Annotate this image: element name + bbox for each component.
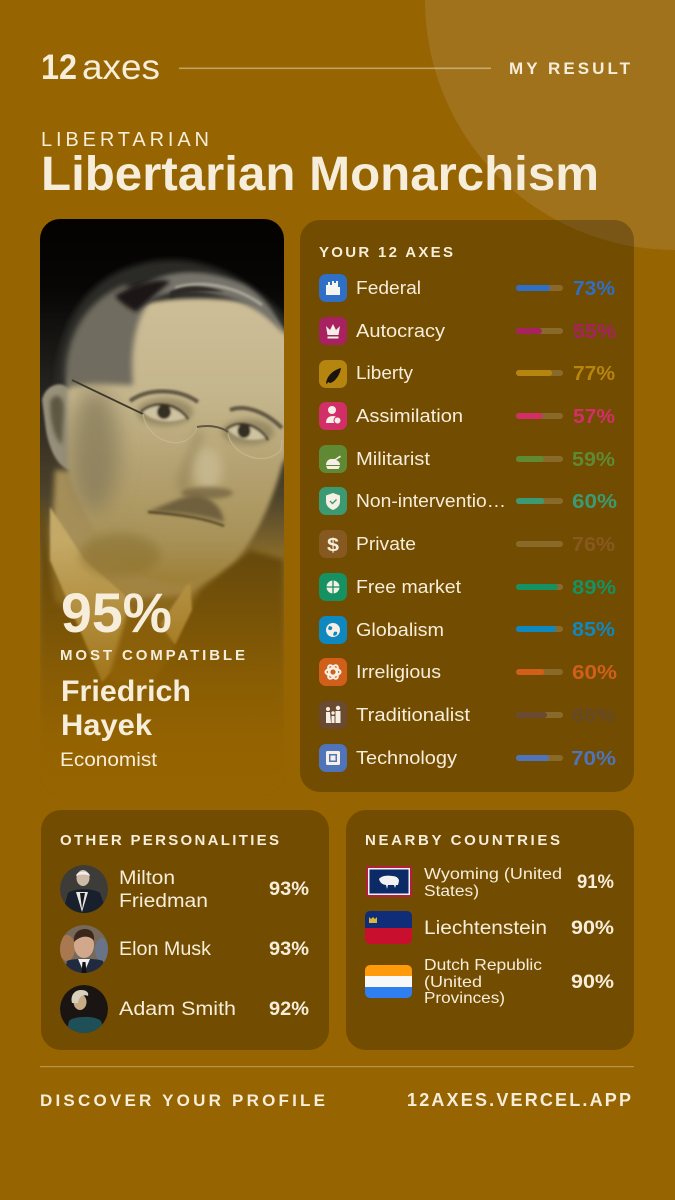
axis row: Free market xyxy=(319,573,616,601)
moustache xyxy=(147,495,224,522)
axis row: Traditionalist: 66% xyxy=(572,705,615,727)
compatibility label: MOST COMPATIBLE xyxy=(60,647,245,664)
personality: Milton Friedman: 93% xyxy=(269,879,309,900)
category: LIBERTARIAN xyxy=(41,129,209,151)
decorative corner circle xyxy=(425,0,675,250)
country: Wyoming: Wyoming (United xyxy=(424,866,562,883)
chin shadow xyxy=(80,533,160,577)
panel: top match portrait xyxy=(40,219,295,795)
axis row: Non-interventionist xyxy=(319,487,617,515)
person role: Economist xyxy=(60,750,158,771)
axis row: Traditionalist: Traditionalist xyxy=(356,705,470,725)
glasses xyxy=(72,380,282,459)
tie xyxy=(110,610,172,673)
person name: Hayek xyxy=(61,709,152,742)
axis row: Free market: 89% xyxy=(572,577,616,599)
axis row: Militarist xyxy=(319,445,615,473)
axis row: Militarist: 59% xyxy=(572,449,615,471)
jacket xyxy=(40,495,284,795)
axis row: Irreligious xyxy=(319,658,617,686)
country: Dutch Republic: Dutch Republic xyxy=(424,957,542,974)
axis row: Technology: Technology xyxy=(356,748,457,768)
personality: Milton Friedman: Friedman xyxy=(119,891,208,912)
axis row: Non-interventionist: 60% xyxy=(572,491,617,513)
axis row: Private: Private xyxy=(356,534,416,554)
header xyxy=(41,48,631,87)
axis row: Free market: Free market xyxy=(356,577,461,597)
logo xyxy=(41,48,160,87)
personality: Elon Musk: Elon Musk xyxy=(119,939,212,960)
axis row: Militarist: Militarist xyxy=(356,449,430,469)
face xyxy=(68,298,295,585)
eye left xyxy=(141,405,188,421)
website: 12AXES.VERCEL.APP xyxy=(407,1090,631,1110)
country: Wyoming xyxy=(366,866,614,900)
country: Liechtenstein: Liechtenstein xyxy=(424,918,547,939)
personality: Elon Musk xyxy=(59,925,309,975)
portrait illustration xyxy=(40,219,295,795)
axis row: Private: 76% xyxy=(572,534,615,556)
temple hair xyxy=(66,285,150,388)
axis row: Federal xyxy=(319,274,615,302)
logo: 12 xyxy=(41,48,77,87)
panel heading: NEARBY COUNTRIES xyxy=(365,832,560,849)
neck xyxy=(52,470,235,600)
panel heading: YOUR 12 AXES xyxy=(319,244,453,261)
panel: other personalities xyxy=(41,810,329,1050)
axis row: Autocracy: Autocracy xyxy=(356,321,445,341)
axis row: Federal: 73% xyxy=(573,278,615,300)
footer xyxy=(40,1066,634,1110)
right collar xyxy=(160,580,192,645)
axis row: Technology xyxy=(319,744,616,772)
axis row: Private xyxy=(319,530,615,558)
country: Wyoming: 91% xyxy=(577,872,614,893)
country: Liechtenstein xyxy=(365,911,614,944)
personality: Milton Friedman xyxy=(60,865,309,915)
my result label: MY RESULT xyxy=(509,59,631,78)
panel: your 12 axes xyxy=(300,220,634,792)
axis row: Technology: 70% xyxy=(571,748,616,770)
axis row: Federal: Federal xyxy=(356,278,421,298)
axis row: Autocracy xyxy=(319,317,616,345)
panel heading: OTHER PERSONALITIES xyxy=(60,832,279,849)
country: Liechtenstein: 90% xyxy=(571,918,614,939)
axis row: Liberty: 77% xyxy=(573,363,615,385)
axis row: Traditionalist xyxy=(319,701,615,729)
call to action: DISCOVER YOUR PROFILE xyxy=(40,1091,325,1110)
country: Dutch Republic: Provinces) xyxy=(424,990,505,1007)
axis row: Private: $ xyxy=(327,535,339,555)
brow and socket left xyxy=(137,398,193,426)
cheek shadow xyxy=(71,388,119,512)
country: Dutch Republic: (United xyxy=(424,974,482,991)
axis row: Globalism xyxy=(319,616,615,644)
compatibility score: 95% xyxy=(61,581,172,644)
bottom fade xyxy=(40,540,284,795)
country: Dutch Republic: 90% xyxy=(571,972,614,993)
logo: axes xyxy=(82,48,160,87)
hair mass xyxy=(56,258,284,384)
axis row: Globalism: 85% xyxy=(572,619,615,641)
axis row: Liberty xyxy=(319,360,615,388)
axis row: Assimilation: 57% xyxy=(573,406,615,428)
axis row: Irreligious: 60% xyxy=(572,662,617,684)
person name xyxy=(61,675,191,742)
axis row: Assimilation xyxy=(319,402,615,430)
panel: nearby countries xyxy=(346,810,634,1050)
axis row: Non-interventionist: Non-interventio… xyxy=(356,491,506,511)
nose shadow xyxy=(176,430,204,490)
country: Wyoming: States) xyxy=(424,883,479,900)
ear xyxy=(42,384,74,470)
brow and socket right xyxy=(222,419,274,445)
personality: Adam Smith xyxy=(60,985,309,1035)
left collar xyxy=(48,507,133,682)
axis row: Assimilation: Assimilation xyxy=(356,406,463,426)
personality: Milton Friedman: Milton xyxy=(119,868,175,889)
person name: Friedrich xyxy=(61,675,191,708)
main title: Libertarian Monarchism xyxy=(41,148,599,201)
personality: Adam Smith: 92% xyxy=(269,999,309,1020)
eye right xyxy=(226,424,268,440)
axis row: Autocracy: 55% xyxy=(573,321,616,343)
personality: Adam Smith: Adam Smith xyxy=(119,999,236,1020)
axis row: Globalism: Globalism xyxy=(356,620,444,640)
axis row: Liberty: Liberty xyxy=(356,363,413,383)
hair streaks xyxy=(125,272,284,335)
title block xyxy=(41,129,599,201)
country: Dutch Republic xyxy=(365,957,614,1007)
personality: Elon Musk: 93% xyxy=(269,939,309,960)
axis row: Irreligious: Irreligious xyxy=(356,662,441,682)
